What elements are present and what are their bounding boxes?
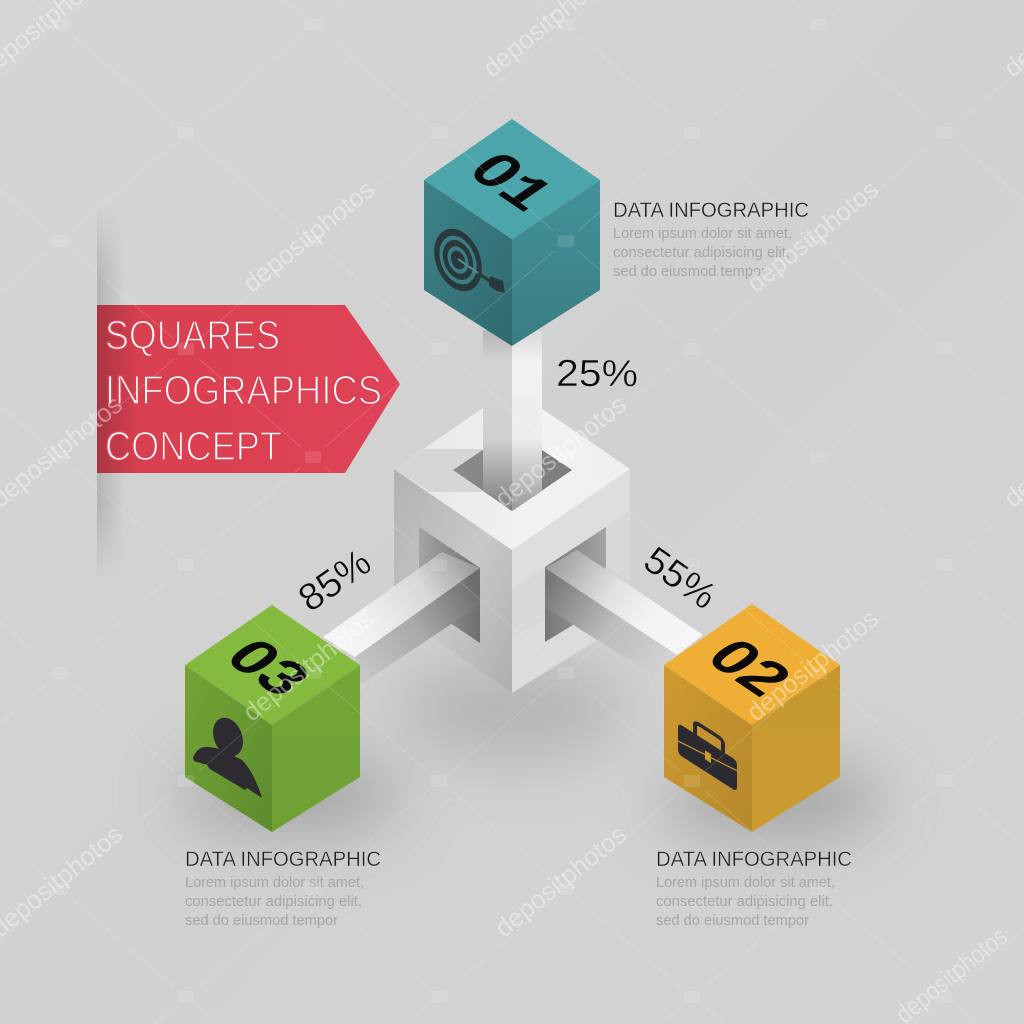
number 01: 01 [450,142,570,224]
title text: CONCEPT [105,423,282,469]
top face [394,388,630,550]
right window [545,527,606,642]
text block 03: Lorem ipsum dolor sit amet, [185,875,364,891]
text block 03 [185,848,381,929]
text block 02: sed do eiusmod tempor [656,913,809,929]
icon: person [193,713,262,798]
title text: SQUARES [105,312,280,358]
icon: briefcase [678,711,737,792]
floor highlight [512,620,597,693]
left beam to cube 03 [323,552,480,684]
text block 03: sed do eiusmod tempor [185,913,338,929]
text block 01: consectetur adipisicing elit, [613,245,790,261]
top hole [453,430,572,511]
watermark text: depositphotos [237,174,380,298]
ground shadows [180,660,885,842]
ribbon shadow strip [97,222,118,560]
central hollow cube [394,330,630,693]
text block 01: Lorem ipsum dolor sit amet, [613,226,792,242]
text block 01 [613,199,809,280]
text block 02: consectetur adipisicing elit, [656,894,833,910]
text block 02: DATA INFOGRAPHIC [656,848,852,871]
left outer face [394,469,512,693]
text block 02: Lorem ipsum dolor sit amet, [656,875,835,891]
text block 02 [656,848,852,929]
number 02: 02 [692,629,806,706]
text block 03: DATA INFOGRAPHIC [185,848,381,871]
watermark text: depositphotos [237,603,380,727]
cube 02 yellow [664,604,840,832]
text block 01: DATA INFOGRAPHIC [613,199,809,222]
title text [105,312,382,469]
watermark text: depositphotos [489,389,632,513]
title ribbon [97,305,400,473]
percent 25%: 25% [556,353,638,395]
cube 01 teal [424,119,600,346]
text block 03: consectetur adipisicing elit, [185,894,362,910]
watermark text: depositphotos [489,819,632,943]
watermark text: depositphotos [741,603,884,727]
percent 55%: 55% [636,539,724,618]
number 03: 03 [211,629,325,706]
icon: target with arrow [425,222,505,298]
right outer face [512,469,630,693]
left window [419,527,480,643]
text block 01: sed do eiusmod tempor [613,264,766,280]
percent 85%: 85% [291,541,379,620]
right beam to cube 02 [545,550,703,692]
title text: INFOGRAPHICS [105,367,382,413]
vertical pillar [483,330,542,511]
cube 03 green [185,605,360,832]
watermark text: depositphotos [741,174,884,298]
